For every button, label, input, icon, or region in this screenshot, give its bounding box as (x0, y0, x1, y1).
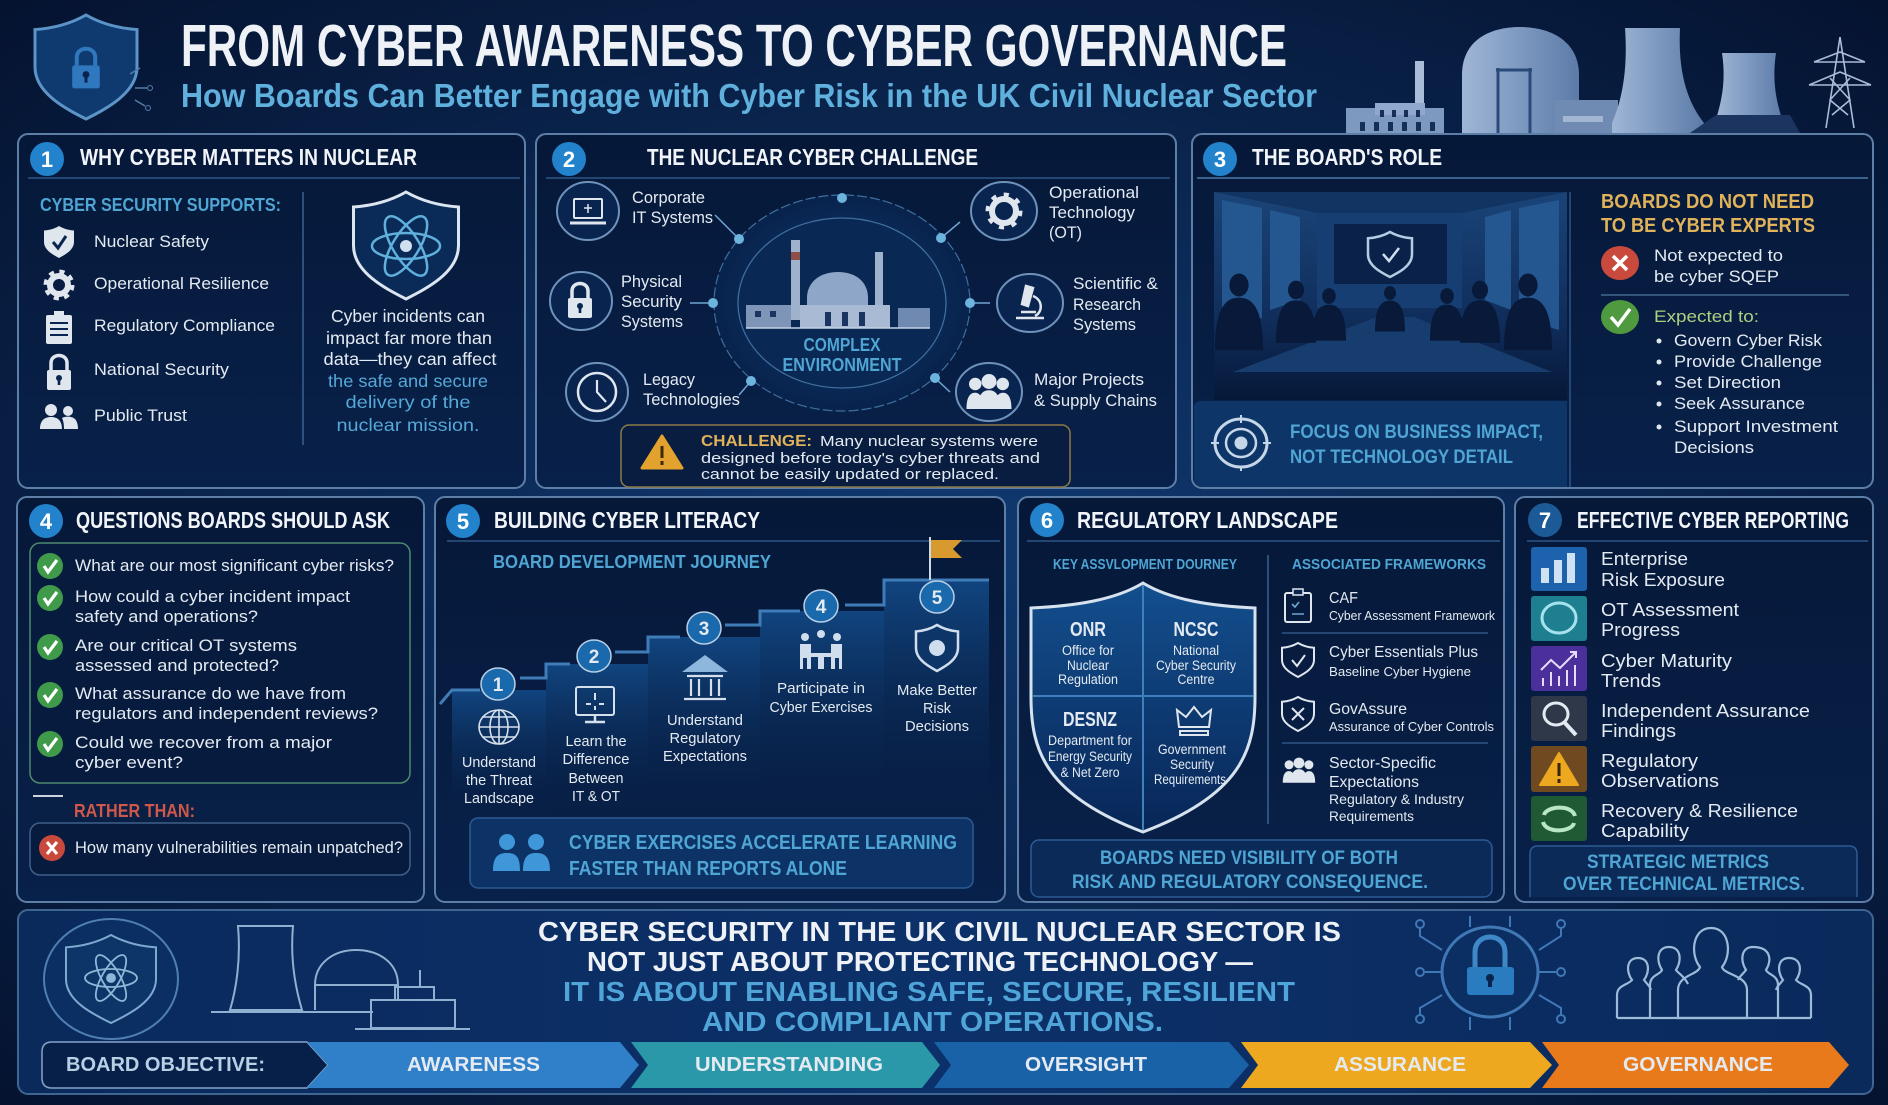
chevron bar: board objective (42, 1042, 1849, 1088)
heading: boards do not need to be experts: BOARDS DO NOT NEED (1601, 191, 1814, 213)
icon: shield check (44, 226, 74, 258)
conclusion statement: IT IS ABOUT ENABLING SAFE, SECURE, RESILIENT (563, 976, 1295, 1007)
panel 5 heading: BUILDING CYBER LITERACY (494, 507, 760, 533)
callout: exercises (470, 818, 973, 888)
conclusion statement: CYBER SECURITY IN THE UK CIVIL NUCLEAR SECTOR IS (538, 916, 1341, 947)
step 4: Participate in (777, 680, 865, 697)
panel 7 number badge: 7 (1539, 508, 1551, 533)
panel 1 heading: WHY CYBER MATTERS IN NUCLEAR (80, 144, 417, 170)
shield of regulators: Government (1158, 742, 1226, 757)
node: scientific research: Systems (1073, 315, 1136, 334)
expected to list: Decisions (1674, 438, 1754, 457)
not expected: be cyber SQEP (1654, 267, 1779, 286)
conclusion statement (538, 916, 1341, 1037)
framework: sector-specific expectations: Requirements (1329, 809, 1414, 824)
impact statement: delivery of the (346, 392, 470, 412)
node: legacy technologies: Technologies (643, 390, 740, 409)
counter-example question: How many vulnerabilities remain unpatched? (75, 838, 403, 857)
diagram: complex environment rings: ENVIRONMENT (782, 355, 902, 375)
node: operational technology: Operational (1049, 183, 1139, 202)
icon: atom shield (354, 192, 458, 299)
panel 3 number badge: 3 (1214, 147, 1226, 172)
node: physical security: Physical (621, 272, 682, 291)
panel 4 heading: QUESTIONS BOARDS SHOULD ASK (76, 507, 390, 533)
node: physical security (550, 272, 683, 331)
shield of regulators: Energy Security (1048, 749, 1132, 764)
node: legacy technologies (566, 363, 740, 421)
node: major projects: & Supply Chains (1034, 391, 1157, 410)
step 5: Make Better (897, 682, 977, 699)
panel 1: why cyber matters in nuclear (18, 134, 525, 488)
step 3: 3 (699, 619, 709, 640)
metric: independent assurance (1531, 696, 1810, 741)
panel 1 number badge (30, 142, 64, 176)
metric: cyber maturity: Trends (1601, 671, 1661, 691)
framework: sector-specific expectations (1283, 755, 1464, 824)
impact statement: impact far more than (326, 328, 492, 348)
step 2: Difference (562, 751, 630, 768)
step 1 (462, 668, 536, 807)
header emblem: shield with padlock (35, 15, 152, 119)
callout: visibility: RISK AND REGULATORY CONSEQUENCE. (1072, 872, 1428, 893)
node: major projects: Major Projects (1034, 370, 1144, 389)
panel 6: regulatory landscape (1018, 497, 1504, 902)
shield of regulators: ONR (1070, 619, 1106, 641)
not expected (1601, 246, 1783, 286)
not expected: Not expected to (1654, 246, 1783, 265)
panel 1 number badge: 1 (41, 147, 53, 172)
metric: OT assessment: Progress (1601, 620, 1680, 640)
panel 7: effective cyber reporting (1515, 497, 1873, 902)
chevron: assurance: ASSURANCE (1334, 1054, 1466, 1076)
impact statement: the safe and secure (328, 371, 488, 391)
framework: CAF: CAF (1329, 590, 1358, 607)
illustration: nuclear plant skyline (1346, 27, 1871, 133)
expected to list: Set Direction (1674, 373, 1781, 392)
node: scientific research: Scientific & (1073, 274, 1159, 293)
callout: visibility: BOARDS NEED VISIBILITY OF BOTH (1100, 848, 1398, 869)
chevron: understanding (631, 1042, 940, 1088)
column heading: key bodies: KEY ASSVLOPMENT DOURNEY (1053, 556, 1237, 573)
callout: challenge: cannot be easily updated or replaced. (701, 466, 999, 483)
metric: enterprise risk exposure: Risk Exposure (1601, 570, 1725, 590)
panel 6 number badge (1030, 503, 1064, 537)
panel 2 number badge: 2 (563, 147, 575, 172)
impact statement: Cyber incidents can (331, 306, 485, 326)
framework: sector-specific expectations: Regulatory & Industry (1329, 792, 1464, 807)
node: corporate IT: Corporate (632, 188, 705, 207)
metric: cyber maturity: Cyber Maturity (1601, 651, 1732, 671)
metric: regulatory observations: Observations (1601, 771, 1719, 791)
node: corporate IT: IT Systems (632, 208, 713, 227)
metric: regulatory observations: Regulatory (1601, 751, 1698, 771)
expected to list: Govern Cyber Risk (1674, 331, 1823, 350)
supports list: National Security (94, 360, 230, 379)
icon: people (40, 404, 78, 429)
callout: strategic metrics: OVER TECHNICAL METRICS. (1563, 874, 1805, 895)
icon: warning triangle (642, 436, 682, 468)
callout: challenge: Many nuclear systems were (820, 433, 1038, 450)
metric: independent assurance: Independent Assurance (1601, 701, 1810, 721)
framework: Cyber Essentials Plus: Cyber Essentials Plus (1329, 644, 1478, 661)
metric: independent assurance: Findings (1601, 721, 1676, 741)
node: legacy technologies: Legacy (643, 370, 695, 389)
shield of regulators: & Net Zero (1060, 765, 1120, 780)
callout: challenge: designed before today's cyber threats and (701, 450, 1040, 467)
question list: assessed and protected? (75, 656, 279, 675)
shield of regulators (1031, 583, 1255, 832)
question list: Could we recover from a major (75, 733, 332, 752)
step 5: Decisions (905, 718, 969, 735)
step 1: the Threat (466, 772, 533, 789)
metric: regulatory observations (1531, 746, 1719, 792)
title: FROM CYBER AWARENESS TO CYBER GOVERNANCE (181, 13, 1287, 79)
chevron: oversight: OVERSIGHT (1025, 1054, 1147, 1076)
rather than: RATHER THAN: (74, 801, 195, 821)
panel 2 heading: THE NUCLEAR CYBER CHALLENGE (647, 144, 978, 170)
chevron: assurance (1241, 1042, 1552, 1088)
callout: exercises: CYBER EXERCISES ACCELERATE LEARNING (569, 832, 957, 854)
panel: bottom conclusion banner (18, 910, 1873, 1094)
chevron: board objective label (42, 1042, 328, 1088)
supports list: Public Trust (94, 406, 187, 425)
metric: recovery and resilience (1531, 796, 1798, 841)
step 2: 2 (589, 647, 599, 668)
node: major projects (956, 363, 1157, 421)
shield of regulators: National (1173, 643, 1219, 658)
step 3: Regulatory (670, 730, 741, 747)
icon: board people outlines (1617, 928, 1811, 1018)
shield of regulators: Centre (1178, 672, 1214, 687)
panel 5: building cyber literacy (435, 497, 1005, 902)
step 4: 4 (816, 597, 827, 618)
counter-example question (30, 823, 410, 875)
metric: enterprise risk exposure: Enterprise (1601, 549, 1688, 569)
illustration: plant outline (211, 926, 470, 1029)
chevron: oversight (934, 1042, 1249, 1088)
illustration: reactor (746, 240, 930, 328)
callout: strategic metrics: STRATEGIC METRICS (1587, 852, 1769, 873)
question list: What assurance do we have from (75, 684, 346, 703)
metric: cyber maturity (1531, 646, 1732, 691)
callout: exercises: FASTER THAN REPORTS ALONE (569, 858, 847, 880)
conclusion statement: AND COMPLIANT OPERATIONS. (702, 1006, 1163, 1037)
step 2 (562, 640, 630, 805)
step 4: Cyber Exercises (770, 699, 872, 716)
panel 5 number badge (446, 504, 480, 538)
shield of regulators: Department for (1048, 733, 1132, 748)
framework: GovAssure: Assurance of Cyber Controls (1329, 719, 1494, 734)
question list: cyber event? (75, 753, 183, 772)
impact statement (324, 306, 497, 435)
icon: clipboard (46, 311, 72, 344)
panel 6 number badge: 6 (1041, 508, 1053, 533)
panel 6 heading: REGULATORY LANDSCAPE (1077, 507, 1338, 533)
expected to list: Seek Assurance (1674, 394, 1805, 413)
panel 4 number badge (29, 504, 63, 538)
icon: target (1211, 415, 1271, 471)
supports list: Operational Resilience (94, 274, 269, 293)
question list: regulators and independent reviews? (75, 704, 378, 723)
node: operational technology (971, 182, 1139, 242)
panel 7 number badge (1528, 503, 1562, 537)
step 4 (770, 590, 872, 716)
step 3 (663, 612, 747, 765)
node: physical security: Systems (621, 312, 683, 331)
expected to list: Provide Challenge (1674, 352, 1822, 371)
shield of regulators: Regulation (1058, 672, 1118, 687)
icon: crown (1177, 707, 1211, 735)
panel 3: the board's role (1192, 134, 1873, 488)
shield of regulators: Cyber Security (1156, 658, 1236, 673)
metric: OT assessment (1531, 596, 1739, 641)
question list: Are our critical OT systems (75, 636, 297, 655)
heading: boards do not need to be experts (1601, 191, 1815, 237)
framework: GovAssure (1282, 697, 1494, 734)
step 3: Understand (667, 712, 743, 729)
metric: recovery and resilience: Capability (1601, 821, 1689, 841)
question list: How could a cyber incident impact (75, 587, 350, 606)
diagram: complex environment rings (690, 193, 990, 411)
expected to list: Expected to: (1654, 307, 1759, 326)
chevron: understanding: UNDERSTANDING (695, 1054, 883, 1076)
conclusion statement: NOT JUST ABOUT PROTECTING TECHNOLOGY — (587, 946, 1253, 977)
panel 2 number badge (552, 142, 586, 176)
framework: CAF (1285, 589, 1495, 623)
chevron: board objective label: BOARD OBJECTIVE: (66, 1054, 265, 1076)
chevron: governance: GOVERNANCE (1623, 1054, 1773, 1076)
step 3: Expectations (663, 748, 747, 765)
expected to list: Support Investment (1674, 417, 1838, 436)
node: scientific research (997, 274, 1159, 334)
framework: CAF: Cyber Assessment Framework (1329, 608, 1495, 623)
step 5: 5 (932, 588, 943, 609)
framework: Cyber Essentials Plus (1282, 643, 1478, 679)
icon: gear (46, 272, 72, 298)
panel 3 heading: THE BOARD'S ROLE (1252, 144, 1442, 170)
impact statement: data—they can affect (324, 349, 497, 369)
question list (30, 543, 410, 783)
node: scientific research: Research (1073, 295, 1141, 314)
framework: GovAssure: GovAssure (1329, 701, 1407, 718)
boardroom screen (1334, 224, 1447, 284)
step 2: IT & OT (572, 788, 620, 805)
chevron: awareness: AWARENESS (407, 1054, 540, 1076)
chevron: governance (1542, 1042, 1849, 1088)
shield of regulators: Nuclear (1067, 658, 1109, 673)
step 1: Understand (462, 754, 536, 771)
focus callout: NOT TECHNOLOGY DETAIL (1290, 447, 1513, 468)
node: operational technology: (OT) (1049, 223, 1082, 242)
question list: What are our most significant cyber risks? (75, 556, 394, 575)
node: corporate IT (557, 182, 713, 240)
question list: safety and operations? (75, 607, 258, 626)
metric: recovery and resilience: Recovery & Resilience (1601, 801, 1798, 821)
icon: padlock (47, 356, 71, 390)
shield of regulators: Requirements (1154, 772, 1226, 787)
panel 3 number badge (1203, 142, 1237, 176)
panel 4 number badge: 4 (40, 509, 53, 534)
callout: challenge (621, 425, 1070, 487)
impact statement: nuclear mission. (336, 415, 480, 435)
diagram: complex environment rings: COMPLEX (804, 335, 880, 355)
node: operational technology: Technology (1049, 203, 1135, 222)
node: physical security: Security (621, 292, 682, 311)
shield of regulators: DESNZ (1063, 709, 1117, 731)
panel 5 number badge: 5 (457, 509, 469, 534)
icon: circuit padlock (1416, 916, 1565, 1030)
subtitle: How Boards Can Better Engage with Cyber Risk in the UK Civil Nuclear Sector (181, 77, 1317, 114)
panel 4: questions boards should ask (17, 497, 424, 902)
icon: gold flag (931, 540, 962, 558)
callout: strategic metrics (1530, 846, 1857, 897)
callout: visibility (1031, 840, 1492, 897)
supports list: Nuclear Safety (94, 232, 210, 251)
expected to list (1601, 300, 1838, 457)
focus callout: FOCUS ON BUSINESS IMPACT, (1290, 422, 1543, 443)
shield of regulators: Security (1170, 757, 1214, 772)
chevron: awareness (307, 1042, 639, 1088)
supports list: Regulatory Compliance (94, 316, 275, 335)
framework: sector-specific expectations: Expectations (1329, 774, 1419, 791)
column heading: associated frameworks: ASSOCIATED FRAMEWORKS (1292, 556, 1486, 573)
metric: enterprise risk exposure (1531, 547, 1725, 591)
step 2: Learn the (566, 733, 626, 750)
icon: atom shield in circle (44, 919, 178, 1039)
illustration: boardroom (1214, 192, 1567, 400)
framework: sector-specific expectations: Sector-Specific (1329, 755, 1436, 772)
focus callout (1194, 401, 1567, 487)
step 1: 1 (493, 675, 504, 696)
subheading: journey: BOARD DEVELOPMENT JOURNEY (493, 552, 771, 572)
supports list: CYBER SECURITY SUPPORTS: (40, 195, 281, 215)
step 5: Risk (923, 700, 951, 717)
framework: Cyber Essentials Plus: Baseline Cyber Hygiene (1329, 664, 1471, 679)
supports list (40, 195, 281, 429)
step 1: Landscape (464, 790, 534, 807)
callout: challenge: CHALLENGE: (701, 433, 812, 450)
metric: OT assessment: OT Assessment (1601, 600, 1739, 620)
step 5 (897, 581, 977, 735)
step 2: Between (568, 770, 624, 787)
staircase (440, 537, 989, 815)
shield of regulators: NCSC (1174, 619, 1218, 641)
heading: boards do not need to be experts: TO BE CYBER EXPERTS (1601, 215, 1815, 237)
shield of regulators: Office for (1062, 643, 1114, 658)
panel 2: nuclear cyber challenge (536, 134, 1176, 488)
